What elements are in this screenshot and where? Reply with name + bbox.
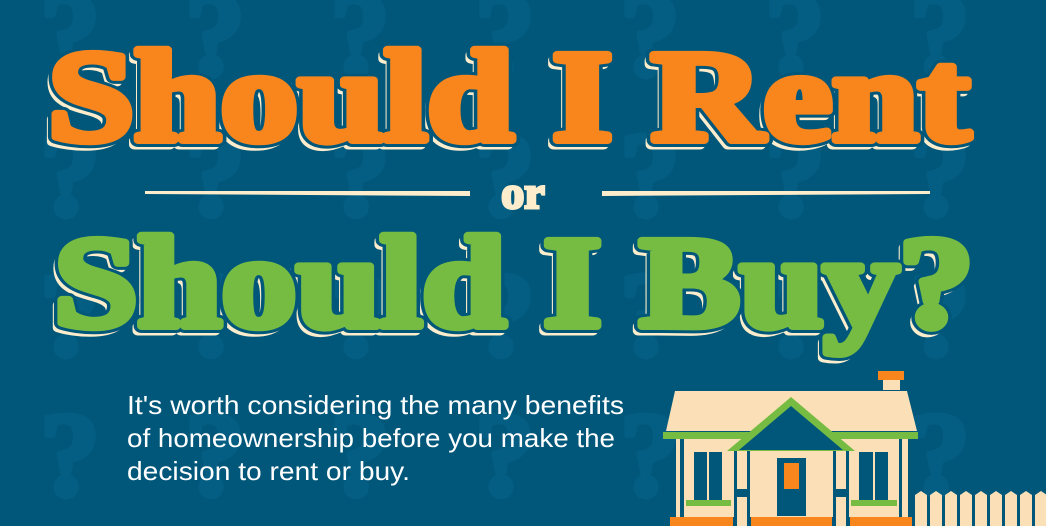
text: ? [910, 108, 970, 241]
text: ? [620, 388, 680, 521]
text: ? [620, 108, 680, 241]
text: ? [330, 388, 390, 521]
fence [915, 491, 1046, 526]
divider with or: or [501, 167, 545, 218]
text: ? [185, 248, 245, 381]
text: ? [765, 388, 825, 521]
text: ? [910, 388, 970, 521]
title line 1: Should I Rent [48, 25, 970, 169]
text: ? [765, 248, 825, 381]
text: ? [40, 108, 100, 241]
text: ? [40, 248, 100, 381]
text: ? [185, 108, 245, 241]
house illustration [663, 371, 918, 526]
text: ? [765, 108, 825, 241]
title line 2: Should I Buy? [54, 211, 974, 355]
title line 2: Should I Buy? [50, 216, 970, 360]
text: ? [330, 248, 390, 381]
text: ? [40, 388, 100, 521]
intro text: It's worth considering the many benefits [127, 390, 624, 420]
title line 2: Should I Buy? [54, 211, 974, 355]
text: ? [620, 248, 680, 381]
text: ? [475, 248, 535, 381]
text: ? [330, 108, 390, 241]
title line 1: Should I Rent [44, 30, 966, 174]
divider with or [145, 167, 930, 218]
title line 1: Should I Rent [48, 25, 970, 169]
intro text: decision to rent or buy. [127, 456, 410, 486]
intro text [127, 390, 624, 486]
intro text: of homeownership before you make the [127, 423, 615, 453]
text: ? [475, 388, 535, 521]
text: ? [475, 108, 535, 241]
text: ? [185, 388, 245, 521]
text: ? [910, 248, 970, 381]
